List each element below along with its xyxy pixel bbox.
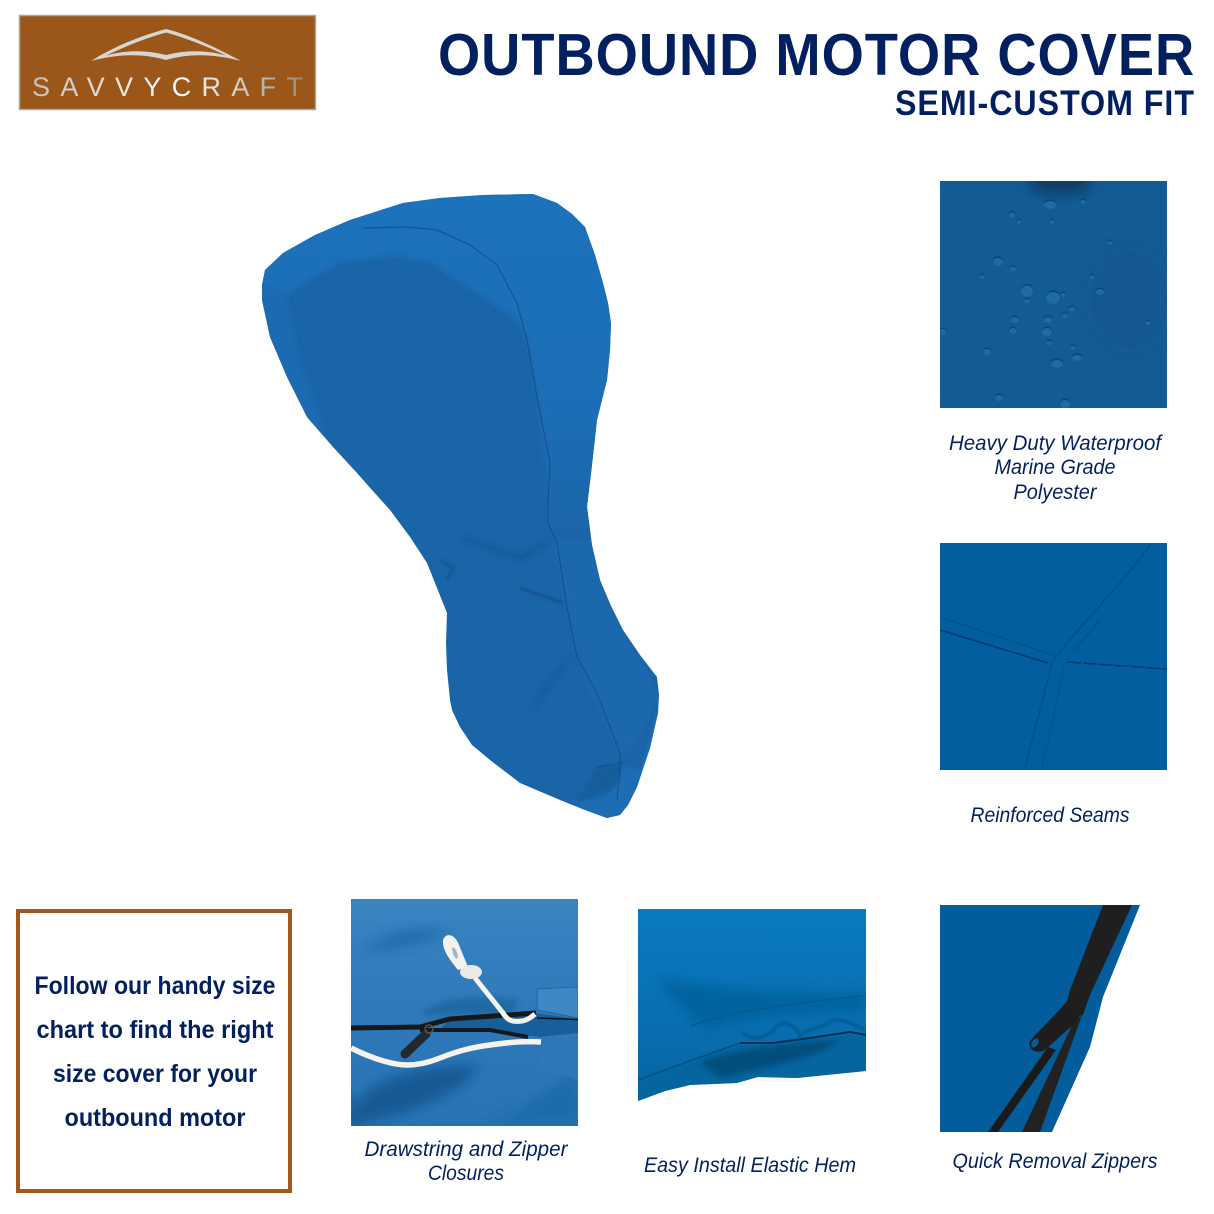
caption: Drawstring and Zipper: [364, 1138, 568, 1161]
callout: size chart box: [18, 911, 290, 1191]
stitched hem line: [690, 995, 866, 1026]
inside of hem: [638, 1034, 866, 1101]
toe of cover: [576, 706, 658, 818]
panel: easy install elastic hem: [638, 909, 866, 1177]
caption: Marine Grade: [994, 456, 1116, 479]
panel: drawstring and zipper closures: [351, 899, 578, 1185]
logo: Savvycraft: [20, 16, 316, 110]
caption: Heavy Duty Waterproof: [949, 432, 1163, 455]
title: [438, 23, 1194, 123]
gathered elastic: [742, 1020, 866, 1038]
panel: waterproof polyester swatch: [940, 169, 1170, 504]
callout: size chart box: outbound motor: [64, 1104, 246, 1132]
seams and folds: [363, 227, 623, 800]
caption: Quick Removal Zippers: [952, 1150, 1158, 1173]
caption: Polyester: [1014, 481, 1097, 504]
caption: [364, 1138, 568, 1185]
icon: boat canopy: [91, 29, 241, 61]
zipper tape: [1062, 905, 1132, 1020]
water droplets: [940, 200, 1150, 408]
panel: reinforced seams swatch: [940, 543, 1167, 827]
right lower panel: [587, 539, 659, 708]
callout: size chart box: size cover for your: [53, 1060, 257, 1088]
white cord: [351, 1042, 541, 1065]
callout: size chart box: chart to find the right: [36, 1016, 274, 1044]
caption: Closures: [428, 1162, 504, 1185]
seam lines: [940, 545, 1167, 768]
fold shadow: [658, 978, 866, 1030]
logo wordmark: SAVVYCRAFT: [32, 72, 303, 102]
zipper pull: [1029, 1000, 1083, 1052]
caption: Easy Install Elastic Hem: [644, 1154, 856, 1177]
main image: blue outboard motor cover: [255, 190, 665, 825]
zipper opening: [440, 1013, 578, 1037]
zipper pull: [405, 1034, 426, 1054]
zipper: [351, 1013, 536, 1028]
caption: [949, 432, 1163, 504]
subtitle: SEMI-CUSTOM FIT: [895, 85, 1194, 123]
title: OUTBOUND MOTOR COVER: [438, 23, 1194, 89]
light top panel of hood: [255, 190, 620, 540]
caption: Reinforced Seams: [970, 804, 1130, 827]
fabric shadows: [369, 926, 442, 952]
panel: quick removal zippers: [940, 905, 1158, 1173]
pocket flap: [537, 987, 578, 1018]
callout: size chart box: Follow our handy size: [34, 972, 276, 1000]
